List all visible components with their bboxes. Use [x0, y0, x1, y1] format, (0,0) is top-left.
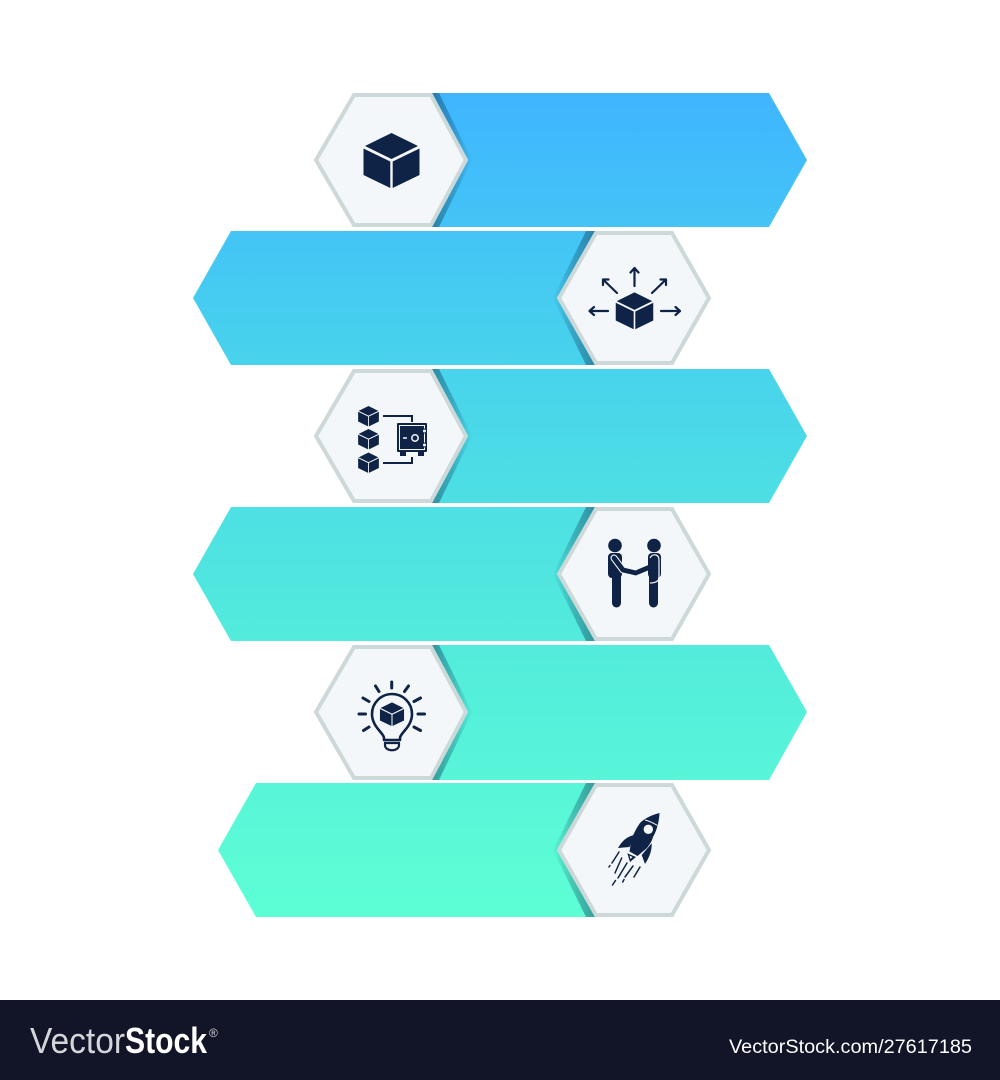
- hexagon shadow 2: [553, 231, 596, 365]
- hexagon 2: [559, 233, 709, 363]
- bar 3: [431, 369, 807, 503]
- hexagon shadow 3: [431, 369, 472, 503]
- row 1: right-pointing bar with box icon: [316, 93, 807, 227]
- icon: cube: [364, 133, 420, 188]
- bar 1: [431, 93, 807, 227]
- registered mark: ®: [209, 1026, 218, 1040]
- icon: two people shaking hands: [608, 539, 661, 608]
- bar 4: [193, 507, 596, 641]
- hexagon shadow 1: [431, 93, 472, 227]
- footer banner: [0, 1000, 1000, 1080]
- bar 5: [431, 645, 807, 780]
- hexagon shadow 6: [553, 783, 596, 917]
- logo wordmark: VectorStock: [30, 1020, 208, 1061]
- hexagon 4: [559, 509, 709, 639]
- hexagon 3: [316, 371, 466, 501]
- row 3: right-pointing bar with safe icon: [316, 369, 807, 503]
- icon: boxes to safe: [358, 406, 427, 473]
- icon: light bulb with box: [359, 682, 424, 750]
- hexagon 1: [316, 95, 466, 225]
- row 4: left-pointing bar with handshake icon: [193, 507, 709, 641]
- bar 2: [193, 231, 596, 365]
- row 6: left-pointing bar with rocket icon: [218, 783, 709, 917]
- hexagon 6: [559, 785, 709, 915]
- row 2: left-pointing bar with exploding box icon: [193, 231, 709, 365]
- icon: rocket: [609, 813, 660, 885]
- image id: VectorStock.com/27617185: [729, 1036, 972, 1058]
- row 5: right-pointing bar with light bulb icon: [316, 645, 807, 780]
- hexagon shadow 4: [553, 507, 596, 641]
- icon: box with arrows: [590, 268, 680, 329]
- hexagon 5: [316, 647, 466, 778]
- hexagon shadow 5: [431, 645, 472, 780]
- bar 6: [218, 783, 596, 917]
